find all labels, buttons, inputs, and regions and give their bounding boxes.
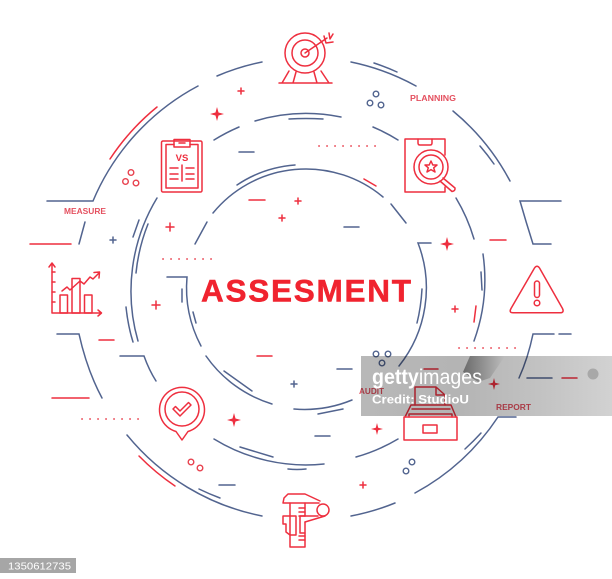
icon: document with magnifier and star (405, 139, 455, 192)
sparkle marks (210, 107, 500, 435)
red accent lines (30, 107, 577, 486)
icon: VS clipboard (162, 140, 202, 192)
labels: REPORT (496, 403, 531, 412)
outer ring segments (47, 62, 571, 516)
small circle clusters (123, 91, 415, 474)
labels: AUDIT (359, 387, 384, 396)
icon: VS clipboard: VS (176, 153, 188, 164)
title: ASSESMENT (201, 272, 411, 308)
labels: PLANNING (410, 94, 456, 103)
icon: caliper (283, 494, 329, 547)
labels: MEASURE (64, 207, 107, 216)
dotted lines (82, 146, 516, 419)
labels (64, 94, 531, 412)
inner ring segments (167, 165, 431, 414)
icon: bar chart with rising arrow (49, 263, 102, 316)
short blue dashes (219, 152, 359, 485)
icon: check mark pin (160, 387, 204, 440)
image id badge: 1350612735 (8, 560, 71, 572)
watermark band (361, 356, 612, 416)
icon: archive drawer (404, 387, 457, 440)
watermark band: gettyimages (372, 366, 482, 389)
plus marks (110, 88, 458, 488)
middle ring segments (120, 113, 485, 470)
icon: target with arrow (279, 33, 333, 83)
watermark band: Credit: StudioU (372, 392, 469, 406)
icon: warning triangle (510, 266, 563, 313)
image id badge (0, 558, 76, 573)
